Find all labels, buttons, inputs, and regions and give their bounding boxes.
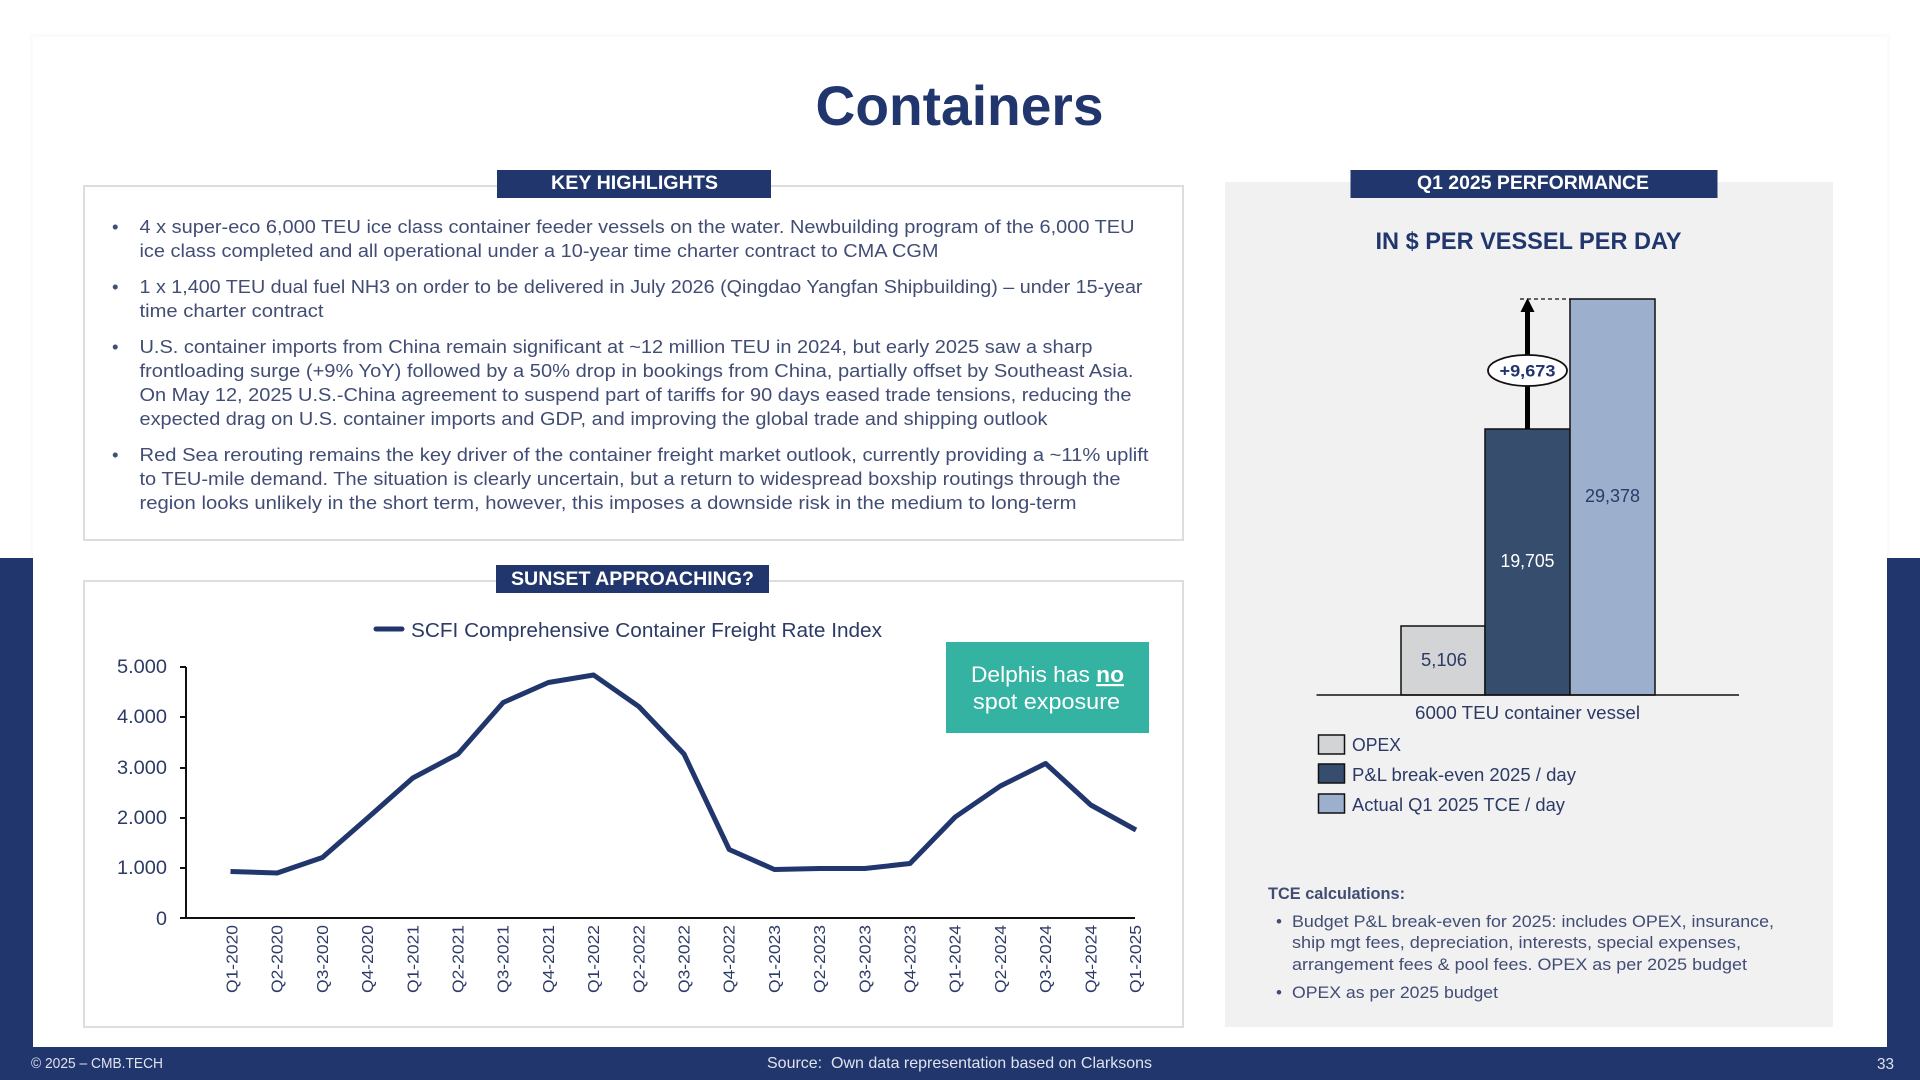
bullet: Red Sea <box>112 444 1148 513</box>
panel: key highlights <box>84 170 1183 540</box>
x axis labels: Q1-2020 <box>224 925 242 993</box>
x axis labels: Q4-2022 <box>722 925 739 993</box>
bar: actual TCE <box>1570 299 1655 695</box>
x axis labels: Q3-2022 <box>676 925 694 993</box>
panel: sunset approaching <box>84 565 1183 1027</box>
heading: Q1 2025 performance: Q1 2025 PERFORMANCE <box>1417 173 1649 194</box>
bullet: feeder vessels: 4 x super-eco 6,000 TEU ice class container feeder vessels on the water. Newbuilding program of the 6,000 TEU <box>140 216 1134 237</box>
bullet: US imports: expected drag on U.S. container imports and GDP, and improving the global trade and shipping outlook <box>140 408 1048 429</box>
text block: TCE calculations: ship mgt fees, depreciation, interests, special expenses, <box>1292 933 1741 952</box>
bullet: dual fuel order <box>112 276 1142 321</box>
bar: OPEX <box>1401 626 1485 695</box>
axes <box>180 667 1135 919</box>
heading: key highlights: KEY HIGHLIGHTS <box>551 173 718 194</box>
x axis labels: Q4-2020 <box>360 925 377 993</box>
x axis labels: Q1-2021 <box>405 925 422 993</box>
bullet: US imports: On May 12, 2025 U.S.-China agreement to suspend part of tariffs for 90 days eased trade tensions, reducing the <box>140 384 1132 405</box>
bullet: Red Sea: region looks unlikely in the short term, however, this imposes a downside risk in the medium to long-term <box>140 492 1076 513</box>
x axis labels: Q4-2023 <box>902 925 920 993</box>
x axis labels: Q4-2021 <box>541 925 558 993</box>
page number: 33 <box>1877 1056 1894 1073</box>
bullet: feeder vessels: • <box>112 216 118 237</box>
callout: difference value: +9,673 <box>1500 362 1556 380</box>
callout: no spot exposure: Delphis has no <box>971 662 1124 687</box>
bullet: dual fuel order: • <box>112 276 118 297</box>
baseline <box>1316 694 1739 696</box>
bullet: US imports: U.S. container imports from China remain significant at ~12 million TEU in 2024, but early 2025 saw a sharp <box>140 336 1092 357</box>
y axis labels: 1.000 <box>117 858 167 879</box>
text block: TCE calculations: • <box>1276 983 1282 1002</box>
title: Containers <box>816 74 1104 137</box>
x axis labels: Q1-2022 <box>586 925 603 993</box>
bullet: Red Sea: to TEU-mile demand. The situation is clearly uncertain, but a return to widespread boxship routings through the <box>140 468 1120 489</box>
bar chart <box>1316 298 1739 723</box>
heading: sunset approaching: SUNSET APPROACHING? <box>511 569 754 590</box>
heading: sunset approaching <box>496 565 769 593</box>
bullet: Red Sea: • <box>112 444 118 465</box>
callout: difference value <box>1488 355 1567 386</box>
x axis labels: Q3-2020 <box>315 925 332 993</box>
legend item: OPEX <box>1318 735 1401 755</box>
panel: Q1 2025 performance <box>1225 170 1833 1027</box>
x axis labels: Q2-2023 <box>812 925 829 993</box>
text block: TCE calculations: TCE calculations: <box>1268 884 1405 903</box>
x axis labels: Q2-2021 <box>450 925 468 993</box>
legend item: P&L break-even: P&L break-even 2025 / day <box>1352 765 1576 785</box>
bullet: feeder vessels: ice class completed and all operational under a 10-year time charter contract to CMA CGM <box>140 240 938 261</box>
chart subtitle: IN $ PER VESSEL PER DAY <box>1376 228 1682 255</box>
x axis labels: Q3-2021 <box>496 925 513 993</box>
arrow: difference <box>1520 298 1534 429</box>
legend item: OPEX: OPEX <box>1352 735 1401 755</box>
text block: TCE calculations: OPEX as per 2025 budget <box>1292 983 1498 1002</box>
x axis labels <box>224 925 1145 993</box>
legend item: actual TCE: Actual Q1 2025 TCE / day <box>1352 795 1565 815</box>
bullet: feeder vessels <box>112 216 1134 261</box>
x axis labels: Q3-2023 <box>857 925 874 993</box>
bar: actual TCE: 29,378 <box>1585 486 1640 506</box>
bar: P&L break-even <box>1485 429 1570 695</box>
y axis labels <box>117 657 167 930</box>
data line <box>230 675 1136 873</box>
bullet: US imports <box>112 336 1134 429</box>
y axis labels: 2.000 <box>117 808 167 829</box>
heading: key highlights <box>497 170 771 198</box>
x axis labels: Q1-2024 <box>948 925 965 993</box>
text block: TCE calculations: • <box>1276 912 1282 931</box>
bullet: Red Sea: Red Sea rerouting remains the key driver of the container freight market outlook, currently providing a ~11% uplift <box>140 444 1148 465</box>
line chart <box>117 657 1145 993</box>
y axis labels: 5.000 <box>117 657 167 678</box>
x axis labels: Q1-2025 <box>1128 925 1145 993</box>
x axis labels: Q2-2024 <box>993 925 1010 993</box>
y axis labels: 4.000 <box>117 707 167 728</box>
x axis label: 6000 TEU container vessel <box>1415 703 1640 723</box>
bullet: dual fuel order: 1 x 1,400 TEU dual fuel NH3 on order to be delivered in July 2026 (Qingdao Yangfan Shipbuilding) – under 15-year <box>140 276 1142 297</box>
y axis labels: 3.000 <box>117 758 167 779</box>
dashed guide <box>1520 298 1570 300</box>
heading: Q1 2025 performance <box>1350 170 1718 198</box>
x axis labels: Q2-2022 <box>631 925 648 993</box>
bullet: US imports: • <box>112 336 118 357</box>
x axis labels: Q3-2024 <box>1038 925 1055 993</box>
footer source: Source: Own data representation based on Clarksons <box>767 1055 1152 1072</box>
text block: TCE calculations: Budget P&L break-even for 2025: includes OPEX, insurance, <box>1292 912 1774 931</box>
bullet: dual fuel order: time charter contract <box>140 300 324 321</box>
x axis labels: Q2-2020 <box>270 925 287 993</box>
bullet: US imports: frontloading surge (+9% YoY) followed by a 50% drop in bookings from China, partially offset by Southeast Asia. <box>140 360 1134 381</box>
legend <box>1318 735 1576 815</box>
callout: no spot exposure <box>946 642 1149 733</box>
callout: no spot exposure: spot exposure <box>973 689 1120 714</box>
footer copyright: © 2025 – CMB.TECH <box>31 1056 163 1072</box>
text block: TCE calculations <box>1268 884 1774 1002</box>
footer <box>0 1047 1920 1080</box>
x axis labels: Q4-2024 <box>1083 925 1100 993</box>
bar: OPEX: 5,106 <box>1421 650 1467 670</box>
x axis labels: Q1-2023 <box>767 925 784 993</box>
y axis labels: 0 <box>156 909 167 930</box>
bar: P&L break-even: 19,705 <box>1500 551 1554 571</box>
chart legend: SCFI Comprehensive Container Freight Rate Index <box>411 620 882 642</box>
text block: TCE calculations: arrangement fees & pool fees. OPEX as per 2025 budget <box>1292 955 1747 974</box>
